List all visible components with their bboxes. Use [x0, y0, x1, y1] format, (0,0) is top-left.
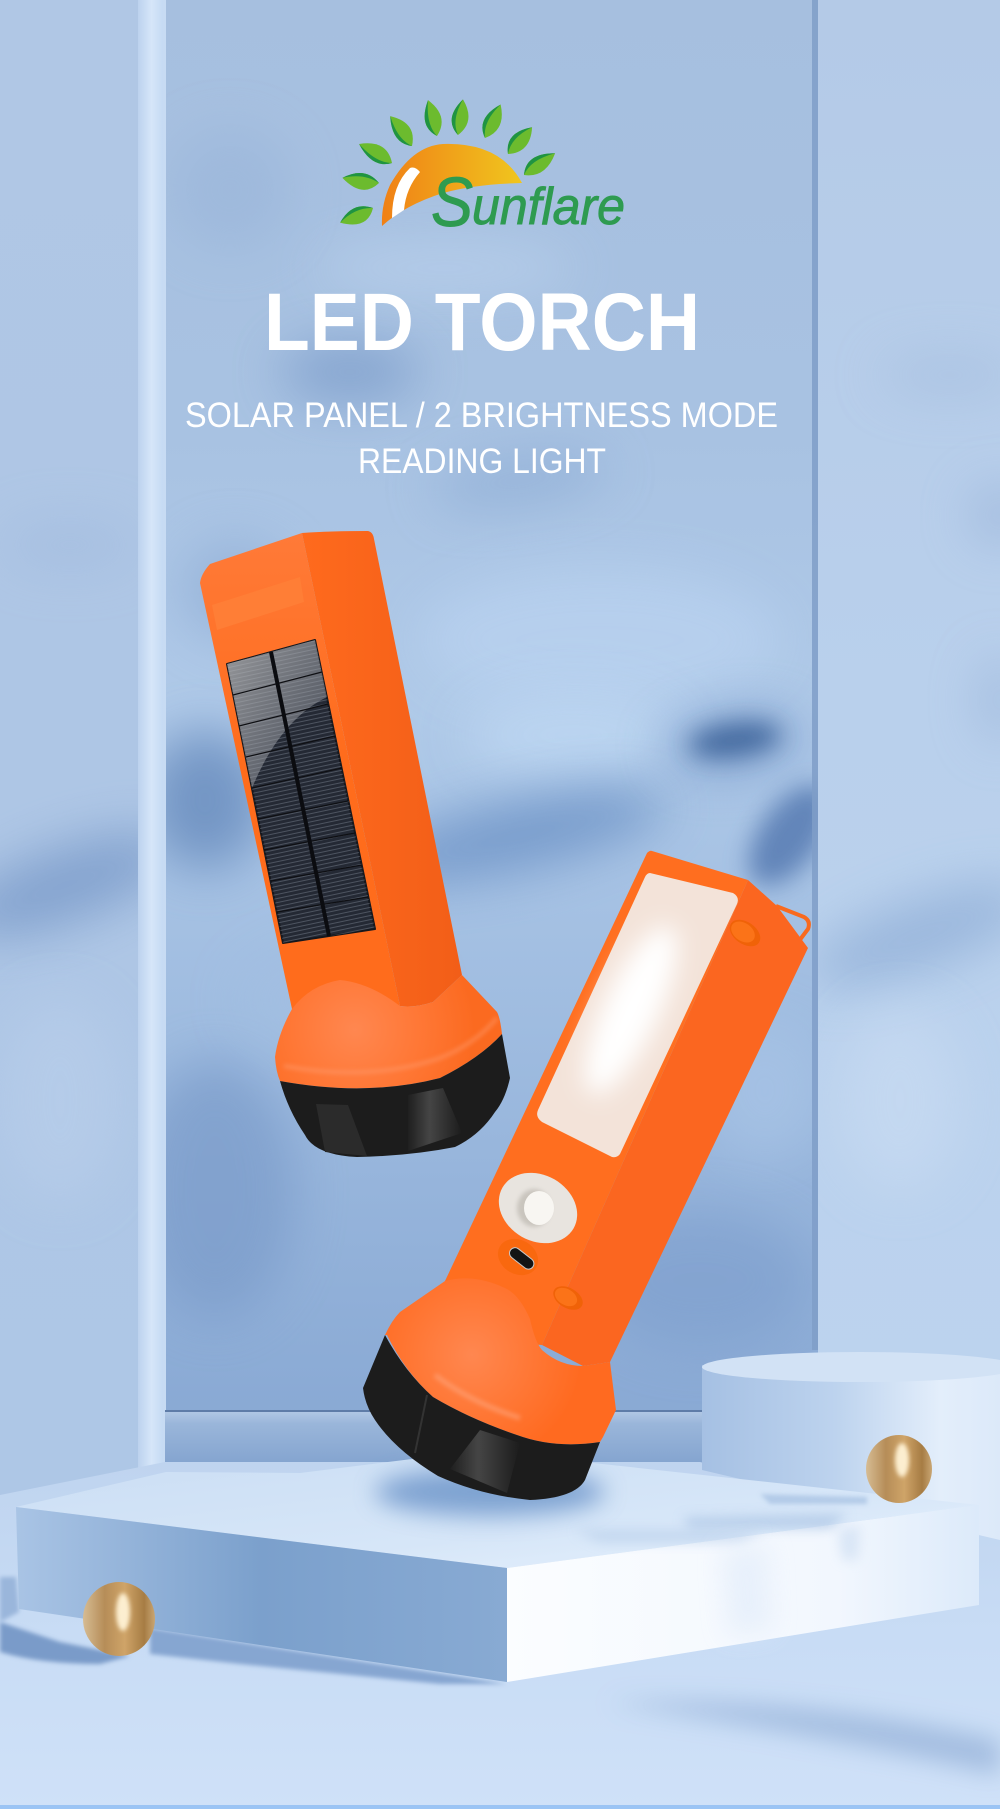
background: back wall panel — [135, 0, 848, 1420]
icon: gold ball left — [83, 1582, 155, 1656]
platform top face — [16, 1458, 979, 1568]
background: floor — [0, 1462, 1000, 1809]
square platform — [16, 1458, 979, 1682]
icon: gold ball right — [866, 1435, 932, 1503]
torch black rim — [280, 1034, 510, 1157]
rim facets — [316, 1088, 462, 1156]
torch: solar panel side — [200, 531, 510, 1157]
torch body side — [542, 880, 808, 1366]
title: LED TORCH — [264, 277, 700, 368]
subtitle: SOLAR PANEL / 2 BRIGHTNESS MODE — [185, 396, 778, 435]
torch body front face — [200, 533, 400, 1020]
logo leaves — [337, 98, 559, 231]
reading light panel — [537, 873, 738, 1157]
logo sun — [382, 144, 522, 226]
USB-C port — [491, 1232, 545, 1282]
hole top — [725, 914, 765, 952]
platform left face — [16, 1507, 507, 1682]
torch flared head — [385, 1278, 616, 1444]
logo wordmark: S — [431, 163, 473, 241]
background: wall skirting — [165, 1410, 725, 1473]
bottom stripe — [0, 1805, 1000, 1809]
sensor window — [486, 1159, 590, 1257]
logo wordmark: unflare — [472, 178, 625, 236]
logo: Sunflare — [337, 98, 625, 241]
logo wordmark — [431, 163, 625, 241]
subtitle: READING LIGHT — [358, 442, 606, 481]
torch body side — [302, 531, 462, 1006]
background: left pillar — [0, 0, 155, 1495]
subtitle — [185, 396, 778, 481]
background: right pillar — [818, 0, 1000, 1360]
torch flared head — [275, 975, 502, 1088]
label recess — [212, 577, 304, 630]
torch black rim — [363, 1335, 600, 1500]
key ring loop — [776, 906, 809, 941]
torch: reading light side — [363, 851, 809, 1500]
rim facets — [415, 1395, 520, 1493]
podium cylinder — [702, 1352, 1000, 1540]
hole bottom — [549, 1281, 587, 1315]
solar panel — [226, 639, 376, 944]
torch body front face — [445, 851, 748, 1345]
platform right face — [507, 1505, 979, 1682]
